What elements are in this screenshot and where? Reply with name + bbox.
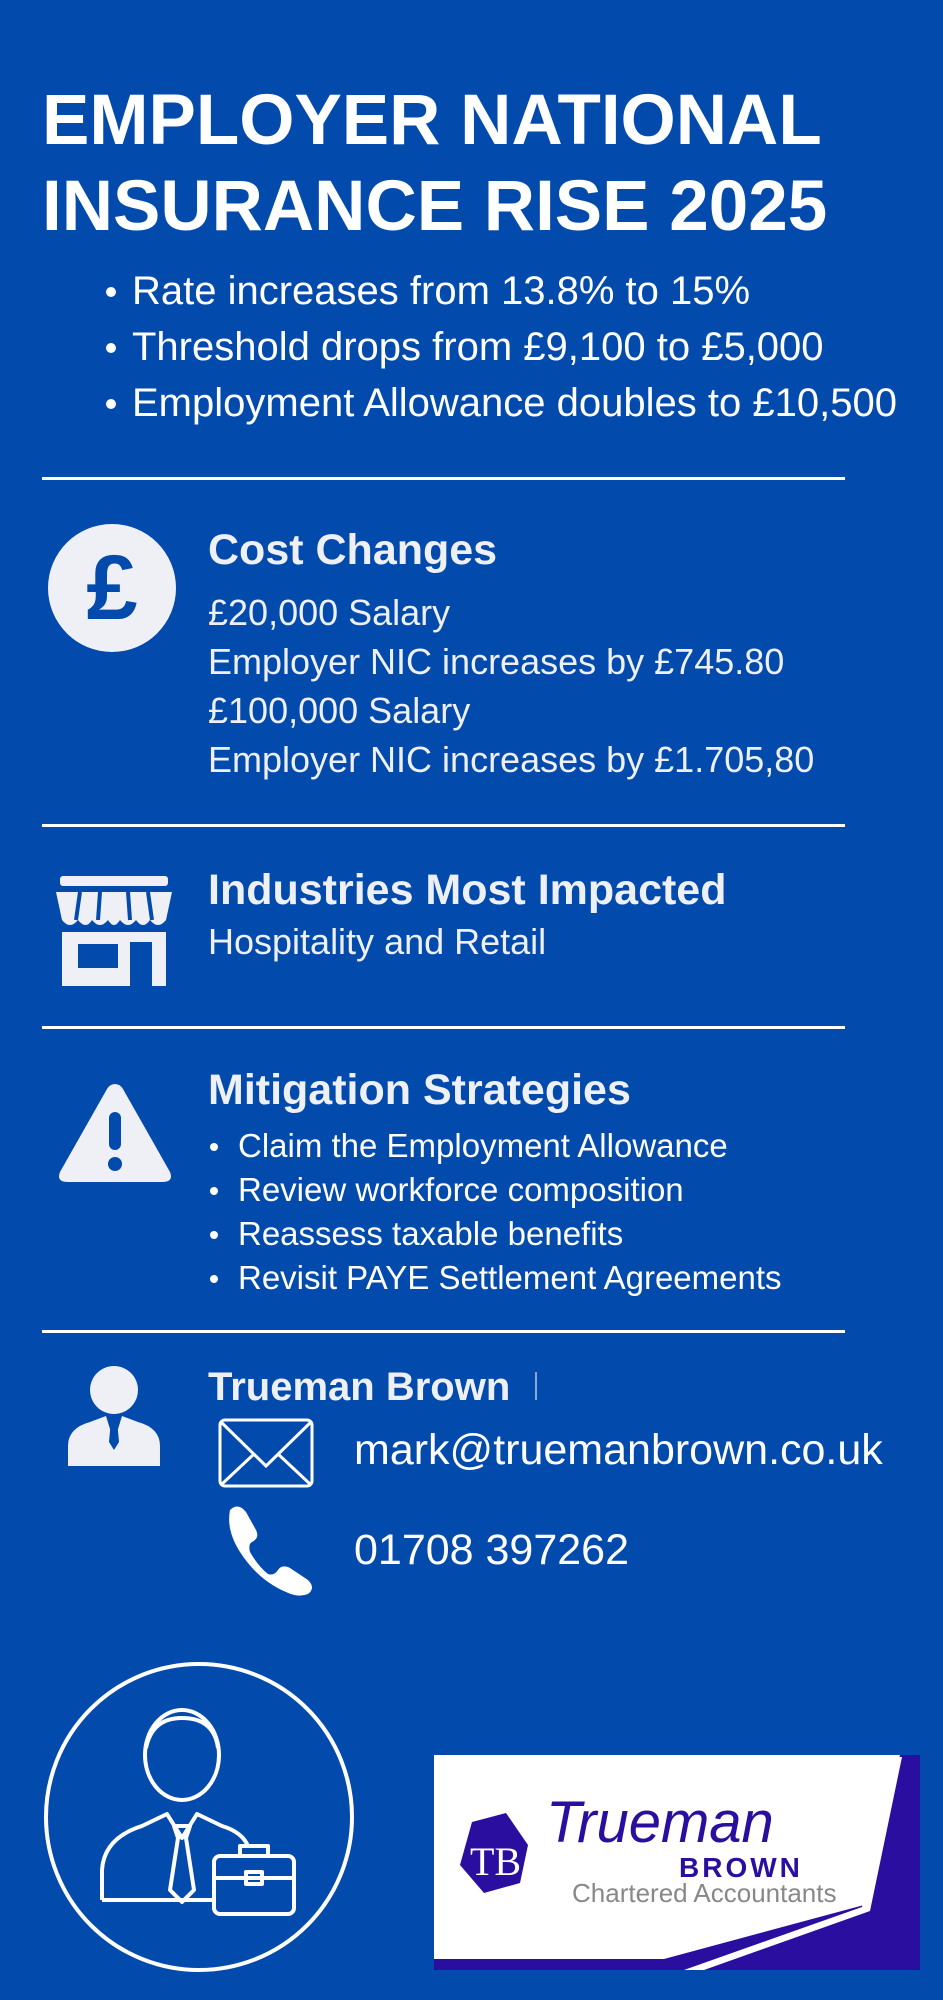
mitigation bullets xyxy=(210,1127,782,1296)
key facts bullets: Rate increases from 13.8% to 15% xyxy=(132,269,750,313)
logo: trueman brown: TB xyxy=(470,1839,521,1884)
panel: cost changes xyxy=(208,526,814,780)
heading: mitigation: Mitigation Strategies xyxy=(208,1066,631,1114)
logo: trueman brown: BROWN xyxy=(679,1852,803,1883)
icon: pound xyxy=(48,524,176,652)
title xyxy=(42,81,827,246)
mitigation bullets: Reassess taxable benefits xyxy=(238,1215,623,1252)
icon: phone xyxy=(229,1506,312,1596)
mitigation bullets: Revisit PAYE Settlement Agreements xyxy=(238,1259,782,1296)
cost text: Employer NIC increases by £745.80 xyxy=(208,641,784,682)
key facts bullets: Employment Allowance doubles to £10,500 xyxy=(132,381,897,425)
title: INSURANCE RISE 2025 xyxy=(42,167,827,246)
logo: trueman brown xyxy=(434,1755,920,1970)
cost text: £20,000 Salary xyxy=(208,592,450,633)
panel: mitigation xyxy=(208,1066,782,1296)
key facts bullets: Threshold drops from £9,100 to £5,000 xyxy=(132,325,824,369)
logo: trueman brown: Chartered Accountants xyxy=(572,1878,836,1908)
cost text xyxy=(208,592,814,780)
title: EMPLOYER NATIONAL xyxy=(42,81,822,160)
industries text: Hospitality and Retail xyxy=(208,921,546,962)
key facts bullets xyxy=(106,269,897,425)
cost text: Employer NIC increases by £1.705,80 xyxy=(208,739,814,780)
heading: cost changes: Cost Changes xyxy=(208,526,497,574)
panel: industries xyxy=(208,866,726,962)
icon: person xyxy=(68,1366,160,1466)
icon: pound: £ xyxy=(86,537,138,639)
cost text: £100,000 Salary xyxy=(208,690,470,731)
heading: trueman brown: Trueman Brown xyxy=(208,1365,510,1409)
icon: shop xyxy=(56,876,172,986)
logo: trueman brown: Trueman xyxy=(546,1790,774,1855)
mitigation bullets: Review workforce composition xyxy=(238,1171,684,1208)
heading: industries: Industries Most Impacted xyxy=(208,866,726,914)
phone text: 01708 397262 xyxy=(354,1526,629,1574)
icon: businessman circle xyxy=(44,1662,354,1972)
icon: warning xyxy=(59,1084,171,1182)
icon: envelope xyxy=(218,1418,314,1488)
mitigation bullets: Claim the Employment Allowance xyxy=(238,1127,728,1164)
email text: mark@truemanbrown.co.uk xyxy=(354,1426,883,1474)
